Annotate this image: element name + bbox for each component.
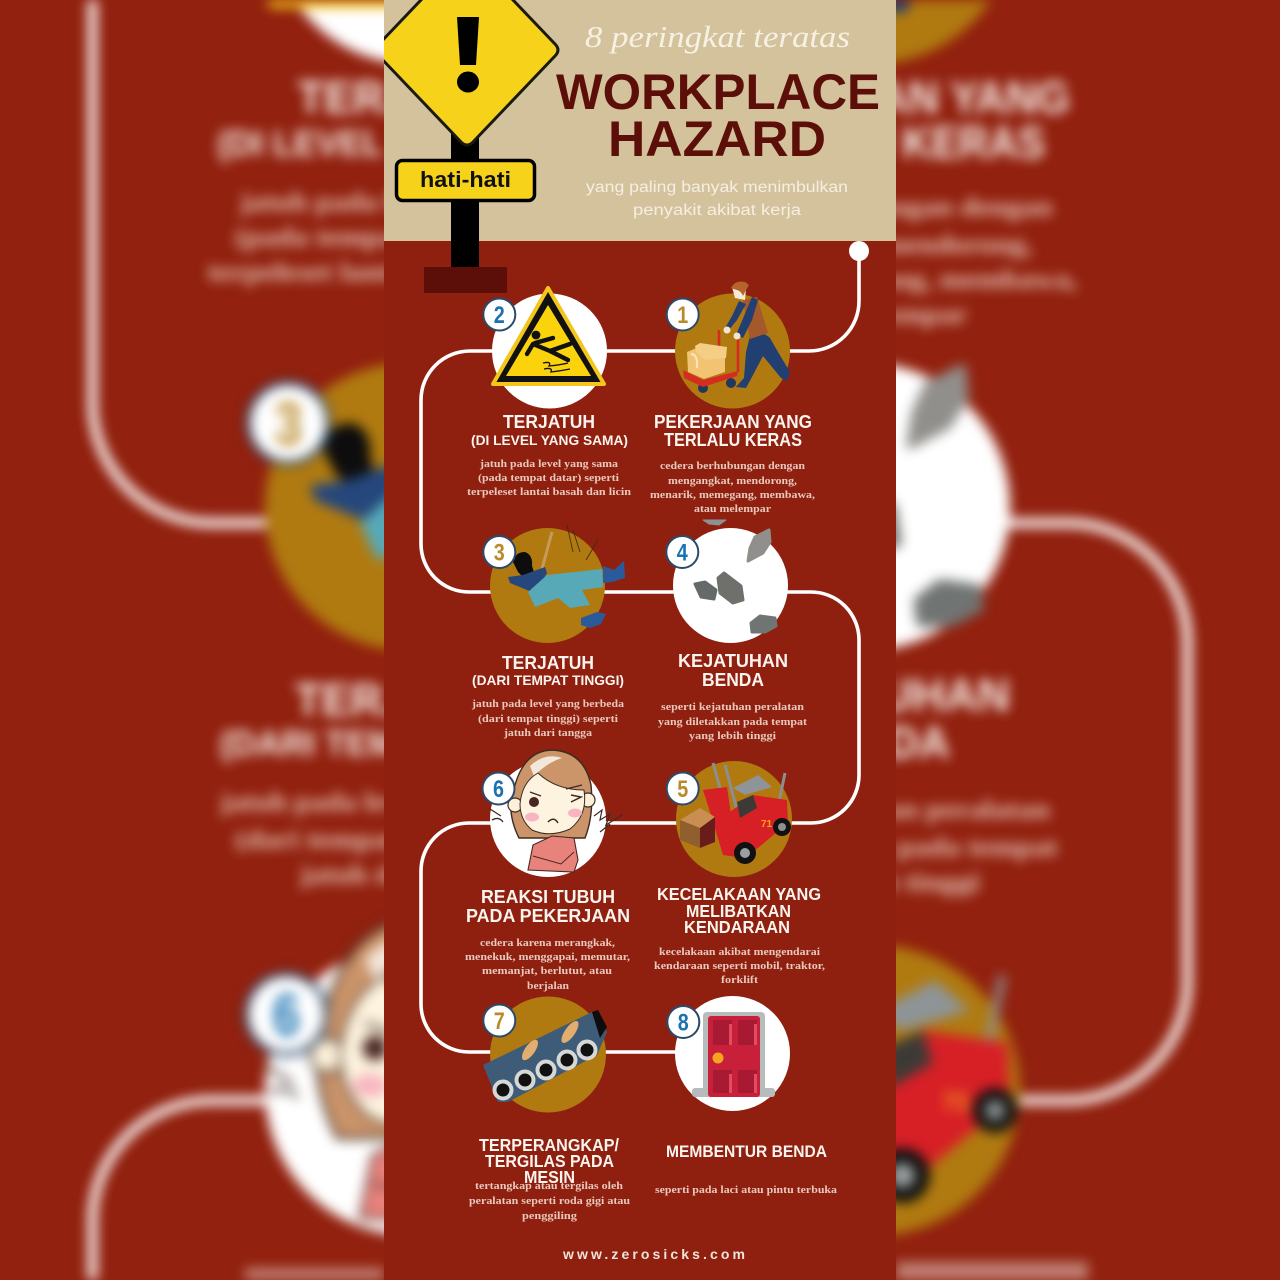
text 1: TERLALU KERAS	[664, 430, 802, 450]
text 1: cedera berhubungan dengan	[660, 461, 805, 472]
text 2: (pada tempat datar) seperti	[478, 473, 619, 484]
circle, forklift icon and badge 5: 71	[761, 819, 773, 830]
hazard 3	[471, 525, 625, 739]
text 4: seperti kejatuhan peralatan	[661, 702, 804, 713]
text 3: (dari tempat tinggi) seperti	[478, 714, 618, 725]
text 1: atau melempar	[694, 504, 771, 515]
description 6: cedera karena merangkak,	[480, 938, 615, 949]
hazard 8	[655, 996, 838, 1196]
circle, worker icon and badge 1	[667, 282, 790, 408]
panel: centre column	[384, 0, 896, 1280]
text 1	[650, 412, 815, 515]
description 6: menekuk, menggapai, memutar,	[465, 952, 630, 963]
circle, falling rocks icon and badge 4	[666, 520, 788, 643]
heading 5: KENDARAAN	[684, 917, 790, 937]
hazard flow content	[421, 241, 869, 1222]
sign: hati-hati: hati-hati	[420, 167, 511, 192]
subtitle	[586, 179, 848, 219]
circle, worker icon and badge 1: 1	[677, 302, 688, 329]
title: HAZARD	[608, 111, 826, 167]
description 5: kendaraan seperti mobil, traktor,	[654, 961, 825, 972]
text 4: KEJATUHAN	[678, 651, 788, 671]
text 2	[467, 412, 631, 498]
hazard 7	[469, 996, 630, 1222]
description 7	[469, 1181, 630, 1222]
hazard 4	[658, 520, 808, 742]
circle 7	[490, 996, 606, 1112]
description 5: forklift	[721, 975, 759, 986]
text 4: yang lebih tinggi	[689, 731, 776, 742]
text 3: jatuh dari tangga	[503, 728, 593, 739]
circle 8	[675, 996, 790, 1111]
subtitle: yang paling banyak menimbulkan	[586, 179, 848, 196]
description 8: seperti pada laci atau pintu terbuka	[655, 1185, 838, 1196]
text 3: (DARI TEMPAT TINGGI)	[472, 672, 624, 688]
heading 6: PADA PEKERJAAN	[466, 905, 630, 926]
circle, falling rocks icon and badge 4: 4	[677, 540, 688, 566]
sign: hati-hati	[396, 160, 534, 200]
title: WORKPLACE	[556, 64, 880, 120]
hazard 5	[654, 761, 825, 986]
text 4	[658, 651, 808, 742]
text 3: jatuh pada level yang berbeda	[471, 699, 625, 710]
heading 6: REAKSI TUBUH	[481, 886, 615, 907]
hazard 1	[650, 282, 815, 515]
text 2: terpeleset lantai basah dan licin	[467, 487, 631, 498]
badge 8: 8	[678, 1010, 689, 1036]
title	[556, 64, 880, 167]
circle, forklift icon and badge 5	[667, 761, 792, 877]
badge 7: 7	[494, 1008, 505, 1035]
heading 7: TERPERANGKAP/	[479, 1135, 619, 1155]
text 1: menarik, memegang, membawa,	[650, 490, 815, 501]
description 7: tertangkap atau tergilas oleh	[475, 1181, 623, 1192]
heading 5	[657, 884, 821, 937]
script subtitle: 8 peringkat teratas	[585, 19, 850, 54]
icon: warning sign with post	[376, 0, 558, 293]
circle, falling woman icon and badge 3	[483, 525, 625, 643]
heading 7: TERGILAS PADA	[485, 1151, 614, 1171]
hazard 2	[467, 288, 631, 498]
text 3	[471, 653, 625, 739]
text 2: TERJATUH	[503, 412, 595, 432]
text 3: TERJATUH	[502, 653, 594, 673]
heading 8: MEMBENTUR BENDA	[666, 1143, 827, 1161]
icon: red door	[692, 1012, 775, 1097]
heading 7	[479, 1135, 619, 1187]
text 1: PEKERJAAN YANG	[654, 412, 812, 432]
text 1: mengangkat, mendorong,	[668, 476, 797, 487]
heading 5: MELIBATKAN	[686, 901, 791, 921]
circle, forklift icon and badge 5: 5	[677, 776, 688, 803]
text 2: jatuh pada level yang sama	[479, 459, 619, 470]
subtitle: penyakit akibat kerja	[633, 202, 801, 219]
circle, girl icon and badge 6: 6	[493, 776, 504, 803]
text 4: BENDA	[702, 670, 764, 690]
description 7: peralatan seperti roda gigi atau	[469, 1196, 630, 1207]
heading 5: KECELAKAAN YANG	[657, 884, 821, 904]
description 6: memanjat, berlutut, atau	[482, 966, 612, 977]
icon: conveyor rollers	[483, 1010, 607, 1102]
heading 6	[466, 886, 630, 926]
circle, girl icon and badge 6	[482, 750, 622, 877]
description 5: kecelakaan akibat mengendarai	[659, 947, 820, 958]
description 5	[654, 947, 825, 986]
description 6	[465, 938, 630, 992]
description 6: berjalan	[527, 981, 569, 992]
badge 8	[667, 1006, 699, 1038]
footer url: www.zerosicks.com	[562, 1246, 745, 1262]
circle, slippery floor icon and badge 2	[483, 288, 607, 408]
connector path	[421, 241, 869, 1052]
text 4: yang diletakkan pada tempat	[658, 717, 808, 728]
hazard 6	[465, 750, 630, 992]
panel: header band	[384, 0, 896, 241]
circle, slippery floor icon and badge 2: 2	[494, 302, 505, 329]
infographic foreground	[384, 0, 896, 1280]
text 2: (DI LEVEL YANG SAMA)	[471, 432, 628, 448]
circle, falling woman icon and badge 3: 3	[494, 540, 505, 566]
heading 7: MESIN	[524, 1167, 575, 1187]
description 7: penggiling	[522, 1211, 578, 1222]
badge 7	[483, 1004, 515, 1036]
